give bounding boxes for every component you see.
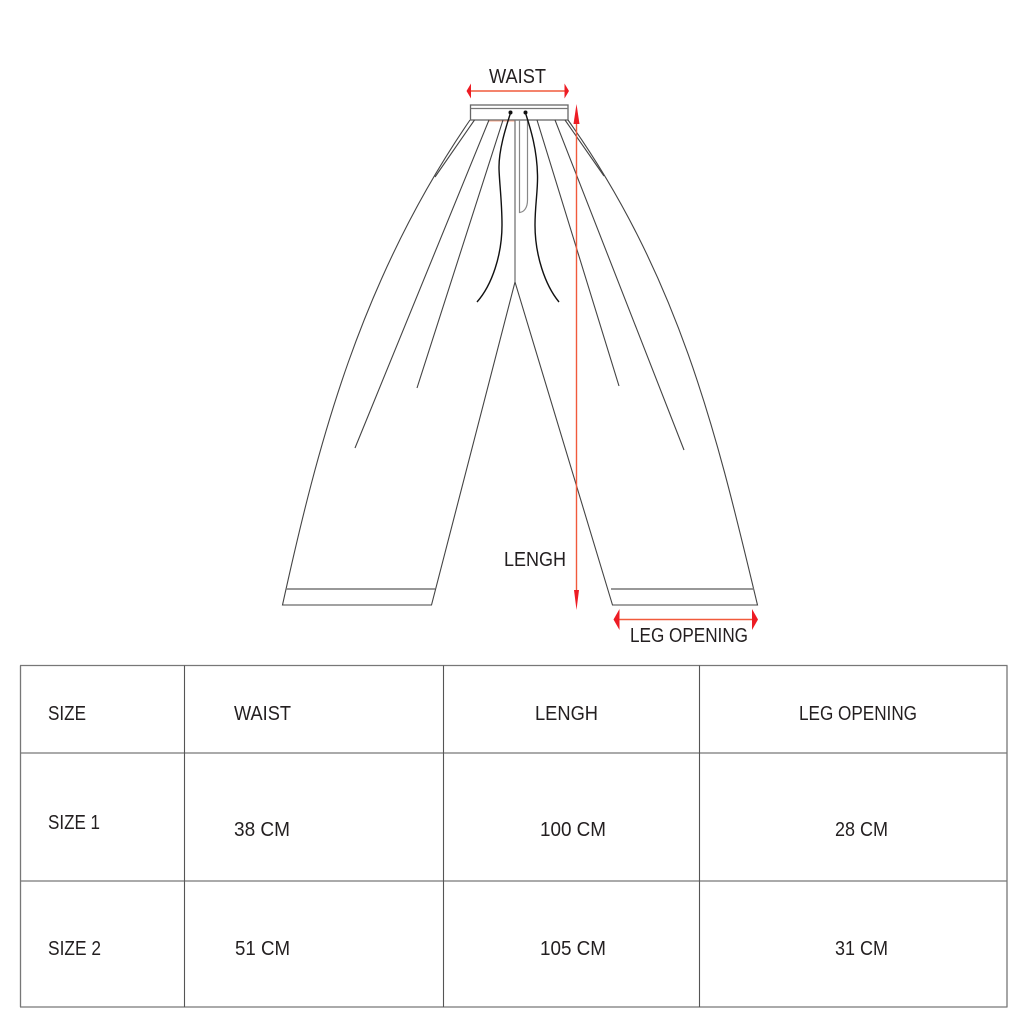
table grid xyxy=(20,666,1008,1007)
drawstring eyelets xyxy=(508,110,528,114)
left hem line xyxy=(286,588,435,590)
header row: LENGH xyxy=(535,703,598,725)
row: size 2: 51 CM xyxy=(235,938,290,960)
pants outline xyxy=(282,120,758,605)
header row: WAIST xyxy=(234,703,291,725)
size table xyxy=(20,666,1008,1007)
pleats xyxy=(355,120,684,450)
row: size 2: 105 CM xyxy=(540,938,606,960)
header row: SIZE xyxy=(48,703,86,725)
row: size 2 xyxy=(48,938,888,960)
row: size 1: SIZE 1 xyxy=(48,812,100,834)
label: leg opening: LEG OPENING xyxy=(630,625,748,647)
row: size 1: 28 CM xyxy=(835,819,888,841)
row: size 1 xyxy=(48,812,888,841)
right drawstring xyxy=(526,113,559,302)
waistband xyxy=(470,105,568,120)
right hem line xyxy=(611,588,754,590)
length arrow xyxy=(574,104,580,610)
fly xyxy=(520,120,528,212)
row: size 1: 38 CM xyxy=(234,819,290,841)
leg opening arrow xyxy=(614,609,758,630)
row: size 2: 31 CM xyxy=(835,938,888,960)
pockets xyxy=(435,120,604,177)
header row xyxy=(48,703,917,725)
header row: LEG OPENING xyxy=(799,703,917,725)
label: waist: WAIST xyxy=(489,66,546,88)
row: size 1: 100 CM xyxy=(540,819,606,841)
waist arrow xyxy=(466,84,569,98)
row: size 2: SIZE 2 xyxy=(48,938,101,960)
label: length: LENGH xyxy=(504,549,566,571)
pants technical drawing xyxy=(282,105,758,605)
center seam xyxy=(514,120,516,282)
waist seam accent xyxy=(488,120,515,122)
left drawstring xyxy=(477,113,510,302)
